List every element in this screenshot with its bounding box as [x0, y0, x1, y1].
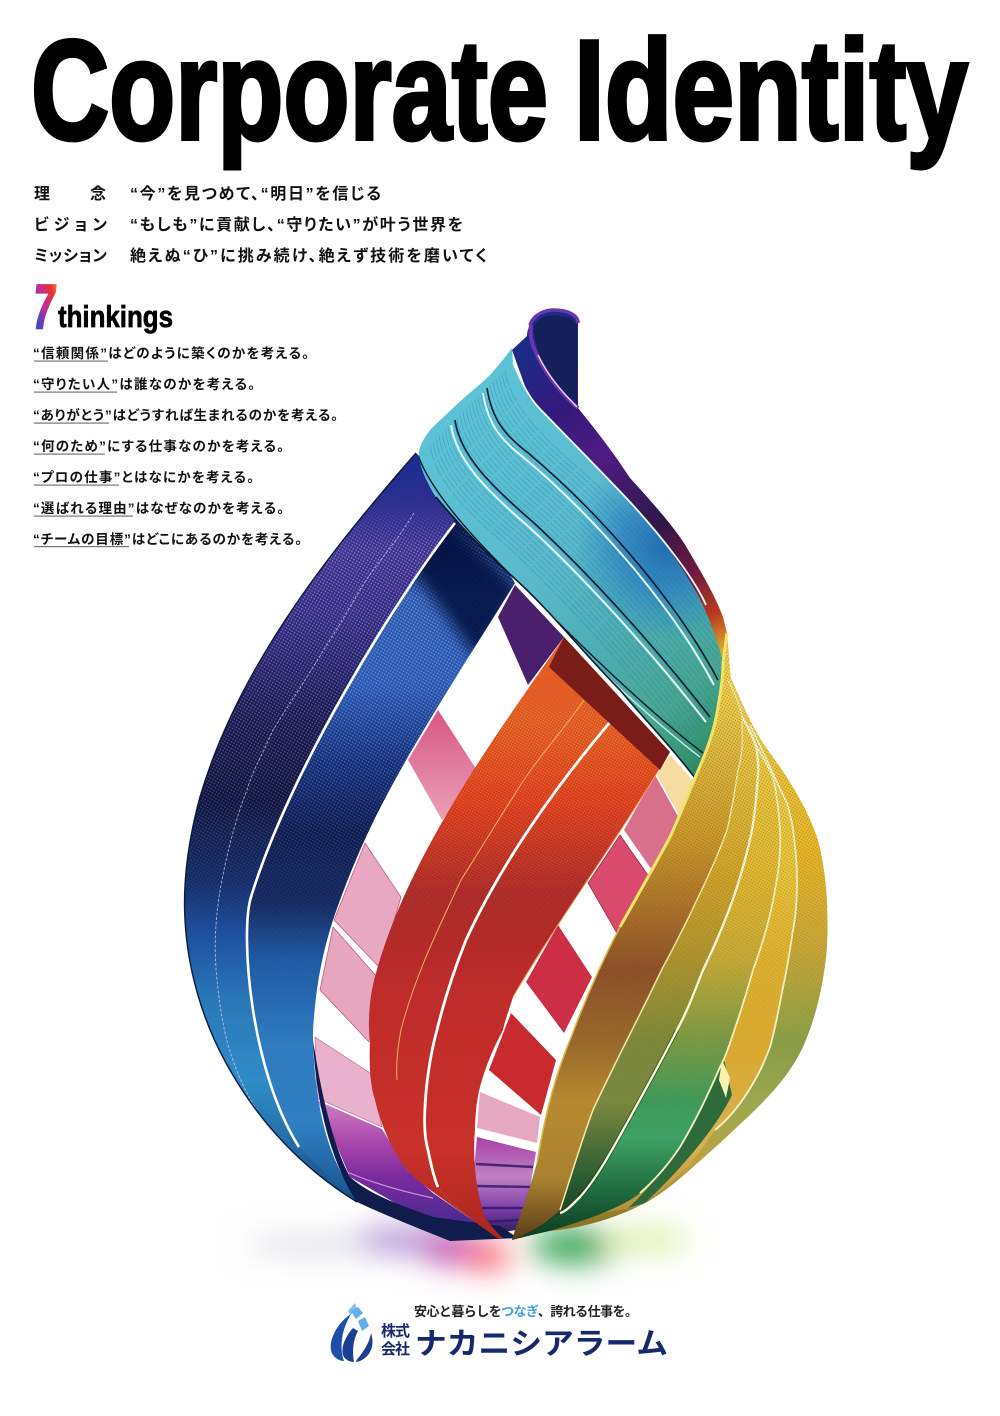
teal fine texture — [430, 370, 722, 742]
green band — [512, 821, 779, 1240]
back ribbon: purple centre — [498, 585, 564, 685]
yellow halftone texture — [564, 640, 828, 1089]
teal band dark creases — [415, 388, 718, 757]
philosophy, vision and mission block — [34, 184, 487, 265]
thinking 3: “ありがとう”はどうすれば生まれるのかを考える。 — [33, 407, 338, 423]
thinking 1: “信頼関係”はどのように築くのかを考える。 — [33, 345, 309, 361]
mission row: 絶えぬ“ひ”に挑み続け、絶えず技術を磨いてく — [130, 246, 487, 265]
left band — [512, 699, 742, 1240]
pink bands: left — [315, 710, 480, 1127]
cream patch beside yellow band — [657, 755, 695, 817]
yellow-green ribbon bands — [512, 632, 828, 1240]
philosophy row — [34, 184, 381, 203]
company type — [381, 1323, 410, 1358]
seven thinkings list — [33, 345, 338, 547]
philosophy row: 理 — [34, 186, 50, 203]
company logo — [331, 1303, 668, 1362]
thinkings word: thinkings — [58, 299, 173, 334]
rainbow ribbon drop — [185, 310, 828, 1241]
blue band: inner — [248, 453, 515, 1201]
thinking 6: “選ばれる理由”はなぜなのかを考える。 — [33, 500, 284, 516]
vision row: “もしも”に貢献し、“守りたい”が叶う世界を — [130, 215, 463, 234]
pink and crimson bands: right — [477, 775, 680, 1143]
company name: ナカニシアラーム — [415, 1328, 668, 1361]
company type: 会社 — [381, 1341, 410, 1358]
small light gap — [719, 1060, 730, 1098]
company type: 株式 — [381, 1323, 410, 1340]
vision row — [34, 215, 463, 234]
tagline: 安心と暮らしをつなぎ、誇れる仕事を。 — [414, 1304, 638, 1319]
dark red shadow under teal band — [549, 637, 670, 770]
title: Corporate — [31, 11, 548, 170]
middle band — [512, 721, 756, 1240]
rainbow ground shadow — [245, 1226, 690, 1269]
philosophy row: “今”を見つめて、“明日”を信じる — [130, 184, 381, 203]
thinking 2: “守りたい人”は誰なのかを考える。 — [33, 376, 255, 392]
teal band — [418, 348, 722, 778]
back ribbon: purple loop — [512, 310, 727, 663]
7 thinkings heading — [30, 273, 173, 342]
mission row: ミッション — [34, 248, 108, 265]
red band: left — [369, 637, 622, 1238]
thinking 4: “何のため”にする仕事なのかを考える。 — [33, 438, 284, 454]
back yellow band — [516, 780, 796, 1227]
thinking 7: “チームの目標”はどこにあるのかを考える。 — [33, 531, 302, 547]
dark green wedge — [628, 1060, 732, 1208]
vision row: ビジョン — [34, 215, 108, 234]
navy base strip — [313, 1040, 518, 1241]
philosophy row: 念 — [90, 185, 106, 203]
logo icon: blue water drop — [331, 1303, 373, 1362]
red band: right — [425, 700, 670, 1238]
rainbow numeral 7: 7 — [30, 273, 59, 342]
blue-purple band: outer — [185, 453, 455, 1202]
thinking 5: “プロの仕事”とはなにかを考える。 — [33, 469, 254, 485]
purple base bands — [318, 1101, 536, 1234]
